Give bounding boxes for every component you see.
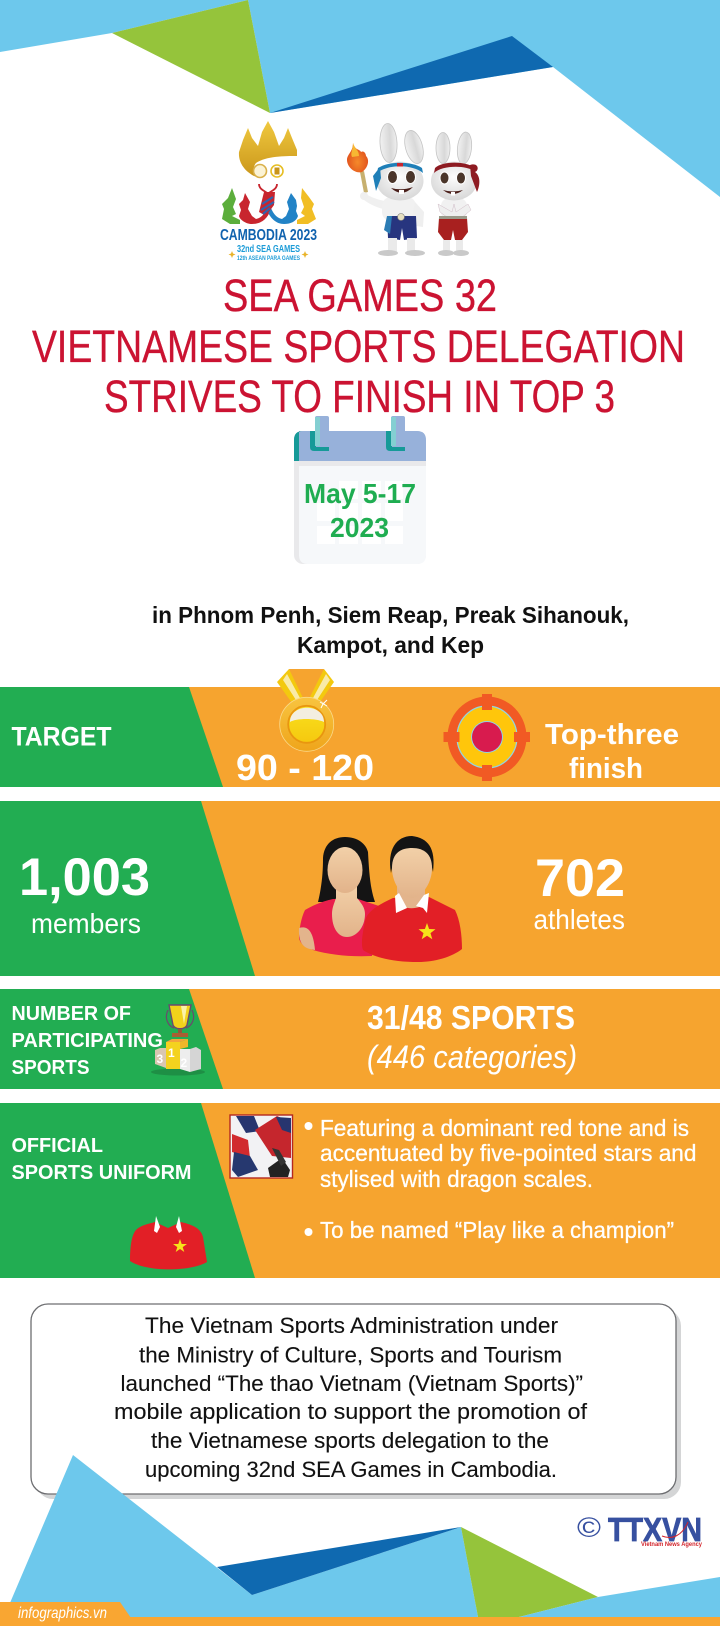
top-three finish text: finish (569, 753, 643, 785)
icon: gold medal (277, 669, 334, 751)
globe swoosh on wordmark (662, 1522, 688, 1537)
location text: Kampot, and Kep (297, 632, 484, 658)
website label: infographics.vn (18, 1605, 107, 1622)
title line 3: STRIVES TO FINISH IN TOP 3 (104, 371, 615, 422)
icon: trophy on podium (151, 1005, 205, 1076)
orange band (0, 801, 720, 976)
callout text: mobile application to support the promotion of (114, 1399, 588, 1424)
callout text (114, 1313, 588, 1482)
icon: two people (299, 836, 462, 962)
orange band (0, 687, 720, 787)
callout: mobile application note (31, 1304, 681, 1499)
lime triangle, bottom (461, 1527, 598, 1617)
naga figures (222, 184, 316, 224)
icon: trophy on podium: 2 (180, 1056, 188, 1070)
gold sparkles (228, 251, 308, 258)
calendar body (294, 431, 426, 564)
callout text: the Vietnamese sports delegation to the (151, 1428, 549, 1453)
icon: red shirt (130, 1216, 207, 1269)
uniform photo (230, 1115, 292, 1178)
Cambodia 2023 logo (220, 121, 317, 262)
heading: PARTICIPATING (12, 1029, 163, 1052)
location text (152, 602, 629, 658)
callout box (31, 1304, 676, 1494)
members label: members (31, 908, 141, 939)
32nd SEA GAMES label: 32nd SEA GAMES (237, 244, 300, 255)
bottom decorative banner (0, 1455, 720, 1626)
date text line 2: 2023 (330, 512, 389, 543)
heading: SPORTS (12, 1056, 90, 1079)
agency name: Vietnam News Agency (641, 1541, 702, 1548)
bullet: design description: Featuring a dominant red tone and is (320, 1115, 689, 1141)
sports count: 31/48 SPORTS (367, 999, 575, 1036)
woman (299, 837, 379, 956)
title (32, 270, 685, 422)
footer tab (0, 1602, 131, 1618)
calendar header (294, 431, 426, 461)
icon: trophy on podium: 3 (156, 1052, 164, 1066)
sky blue shape, bottom right (519, 1577, 720, 1617)
calendar with dates (294, 416, 426, 564)
location text: in Phnom Penh, Siem Reap, Preak Sihanouk, (152, 602, 629, 628)
callout shadow (36, 1309, 681, 1499)
calendar rings (310, 416, 405, 451)
green band (0, 1103, 255, 1278)
categories count: (446 categories) (367, 1039, 577, 1075)
green band (0, 687, 223, 787)
12th ASEAN PARA GAMES label: 12th ASEAN PARA GAMES (237, 255, 301, 262)
TTXVN wordmark: TTXVN (608, 1511, 702, 1548)
top decorative banner (0, 0, 720, 197)
panel: members and athletes (0, 801, 720, 976)
man (362, 836, 462, 962)
calendar grid (317, 481, 403, 544)
lime triangle, top (112, 0, 270, 113)
panel: target (0, 669, 720, 788)
top-three finish text (545, 719, 679, 785)
orange band (0, 1103, 720, 1278)
mascot: female rabbit (431, 131, 479, 256)
sky blue shape, bottom left (4, 1455, 478, 1617)
mascots (347, 123, 479, 256)
icon: trophy on podium: 1 (168, 1046, 175, 1060)
heading: NUMBER OF (12, 1002, 131, 1025)
green band (0, 801, 255, 976)
panel: participating sports (0, 989, 720, 1089)
heading: OFFICIAL (12, 1134, 103, 1157)
dark blue triangle, top (270, 36, 553, 113)
callout text: the Ministry of Culture, Sports and Tourism (139, 1342, 562, 1368)
TARGET label: TARGET (12, 722, 112, 752)
heading: SPORTS UNIFORM (12, 1161, 192, 1184)
green band (0, 989, 223, 1089)
bullet: uniform name: To be named “Play like a champion” (320, 1217, 674, 1243)
callout text: launched “The thao Vietnam (Vietnam Sports)” (120, 1371, 583, 1396)
mascot: male rabbit with torch (347, 123, 427, 256)
members number: 1,003 (19, 848, 150, 907)
date text line 1: May 5-17 (304, 478, 416, 509)
bullet: design description: stylised with dragon scales. (320, 1166, 593, 1192)
icon: target (444, 694, 530, 781)
TTXVN credit (577, 1511, 702, 1548)
sky blue shape, top (0, 0, 720, 197)
90 - 120 value: 90 - 120 (236, 747, 374, 788)
copyright symbol: © (577, 1512, 601, 1543)
top-three finish text: Top-three (545, 719, 679, 751)
orange footer strip (0, 1617, 720, 1626)
panel: official sports uniform (0, 1103, 720, 1278)
heading (12, 1134, 192, 1184)
callout text: The Vietnam Sports Administration under (145, 1313, 558, 1338)
bullet: design description: accentuated by five-pointed stars and (320, 1140, 696, 1166)
crown (239, 121, 297, 178)
callout text: upcoming 32nd SEA Games in Cambodia. (145, 1457, 557, 1482)
CAMBODIA 2023 label: CAMBODIA 2023 (220, 227, 317, 244)
bullet: design description (304, 1115, 696, 1192)
orange band (0, 989, 720, 1089)
dark blue triangle, bottom (217, 1527, 461, 1595)
heading (12, 1002, 163, 1079)
title line 1: SEA GAMES 32 (223, 270, 497, 321)
seals (254, 164, 283, 178)
athletes label: athletes (534, 904, 625, 935)
athletes number: 702 (535, 849, 625, 908)
